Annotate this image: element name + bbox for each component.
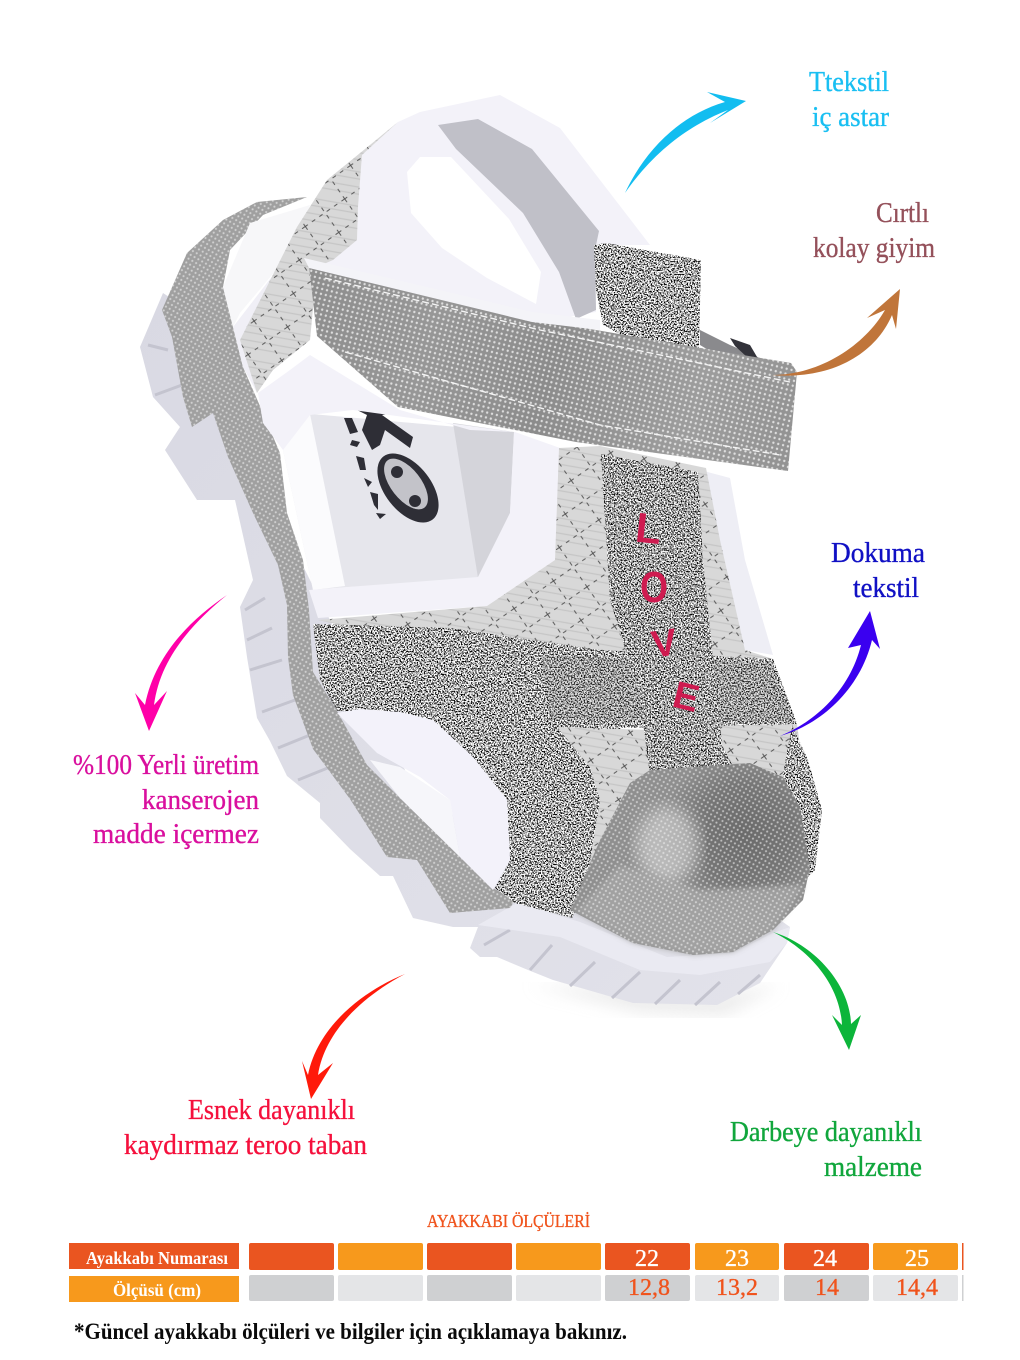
label: textile lining: Ttekstil bbox=[809, 67, 889, 98]
translucent silver rim bbox=[162, 197, 515, 913]
shoe number cells: 22 bbox=[635, 1246, 659, 1272]
row header: shoe number bbox=[69, 1243, 239, 1269]
label: local production: madde içermez bbox=[93, 819, 259, 850]
strap dot texture bbox=[309, 266, 797, 471]
label: local production: kanserojen bbox=[142, 785, 259, 816]
table title: AYAKKABI ÖLÇÜLERİ bbox=[427, 1211, 590, 1231]
loop inner lining bbox=[438, 119, 599, 319]
label: flexible sole bbox=[124, 1095, 367, 1161]
arrow: green to impact-resistant toe bbox=[773, 932, 861, 1050]
size cells: 14,4 bbox=[896, 1275, 938, 1301]
label: flexible sole: kaydırmaz teroo taban bbox=[124, 1130, 367, 1161]
back quarter mesh fabric bbox=[240, 122, 398, 393]
shoe number cells: 25 bbox=[905, 1246, 929, 1272]
lower white padding bbox=[337, 709, 510, 890]
white collar and loop bbox=[312, 95, 650, 322]
middle mesh panel bbox=[318, 446, 806, 790]
LOVE strip bbox=[601, 454, 735, 775]
outsole lug grooves bbox=[148, 345, 760, 1005]
arrow: cyan to textile lining bbox=[625, 92, 746, 193]
lower side opening bbox=[370, 760, 460, 857]
row header: shoe number: Ayakkabı Numarası bbox=[86, 1248, 228, 1268]
label: impact resistant: Darbeye dayanıklı bbox=[730, 1117, 922, 1148]
toe cap lower tone bbox=[575, 865, 805, 955]
side opening insole bbox=[283, 413, 514, 590]
LOVE lettering: L bbox=[633, 504, 664, 553]
label: velcro: Cırtlı bbox=[876, 198, 929, 229]
lower glitter panel bbox=[313, 624, 797, 918]
label: woven textile: tekstil bbox=[853, 573, 919, 604]
shoe photo: silver children's sandal bbox=[140, 95, 822, 1015]
outsole bbox=[140, 293, 790, 1005]
front sole lip highlight bbox=[478, 903, 790, 975]
label: local production: %100 Yerli üretim bbox=[73, 750, 259, 781]
shoe number cells: 23 bbox=[725, 1246, 749, 1272]
toe cap bbox=[570, 763, 810, 955]
label: impact resistant bbox=[730, 1117, 922, 1183]
insole logo bbox=[344, 408, 451, 534]
arrow: red to sole bbox=[302, 974, 405, 1099]
label: textile lining bbox=[809, 67, 890, 133]
arrow: magenta to local production bbox=[135, 595, 227, 731]
ground shadow bbox=[530, 985, 780, 1015]
LOVE lettering: E bbox=[669, 674, 703, 721]
buckle bbox=[700, 330, 760, 366]
side opening padding bbox=[258, 355, 560, 618]
arrow: brown to velcro bbox=[772, 289, 900, 376]
shoe number cells bbox=[249, 1243, 964, 1272]
size cells: 12,8 bbox=[628, 1275, 670, 1301]
row header: size in cm: Ölçüsü (cm) bbox=[113, 1280, 201, 1301]
label: woven textile: Dokuma bbox=[831, 538, 926, 569]
strap stitching bbox=[325, 278, 790, 455]
label: woven textile bbox=[831, 538, 926, 604]
label: local production bbox=[73, 750, 259, 850]
white edge right of the mesh bbox=[700, 470, 773, 655]
LOVE lettering: O bbox=[640, 563, 668, 612]
LOVE lettering: V bbox=[649, 621, 680, 667]
footnote: *Güncel ayakkabı ölçüleri ve bilgiler için açıklamaya bakınız. bbox=[74, 1319, 627, 1344]
label: impact resistant: malzeme bbox=[824, 1152, 922, 1183]
size table bbox=[69, 1211, 964, 1302]
toe side glitter edge bbox=[783, 725, 822, 885]
label: textile lining: iç astar bbox=[812, 102, 890, 133]
size cells bbox=[249, 1275, 964, 1301]
toe mesh patch bbox=[700, 725, 808, 800]
toe cap highlight bbox=[636, 807, 700, 883]
white collar edge at heel bbox=[233, 178, 345, 393]
lower mesh patch bbox=[557, 727, 655, 880]
rim dot texture bbox=[162, 197, 515, 913]
toe cap dot texture bbox=[570, 763, 810, 955]
insole right shade bbox=[453, 423, 514, 578]
glitter band shading bbox=[540, 655, 795, 722]
label: velcro bbox=[813, 198, 935, 264]
label: velcro: kolay giyim bbox=[813, 233, 935, 264]
heel insole bbox=[223, 205, 310, 327]
insole left wall bbox=[283, 413, 345, 590]
glitter tab bbox=[594, 243, 701, 348]
LOVE lettering bbox=[633, 504, 703, 721]
size cells: 13,2 bbox=[716, 1275, 758, 1301]
label: flexible sole: Esnek dayanıklı bbox=[188, 1095, 355, 1126]
opening in the loop bbox=[407, 157, 541, 304]
strap bbox=[309, 266, 797, 471]
size cells: 14 bbox=[815, 1275, 839, 1301]
arrow: blue to woven textile bbox=[780, 611, 880, 736]
shoe number cells: 24 bbox=[813, 1246, 837, 1272]
row header: size in cm bbox=[69, 1276, 239, 1302]
